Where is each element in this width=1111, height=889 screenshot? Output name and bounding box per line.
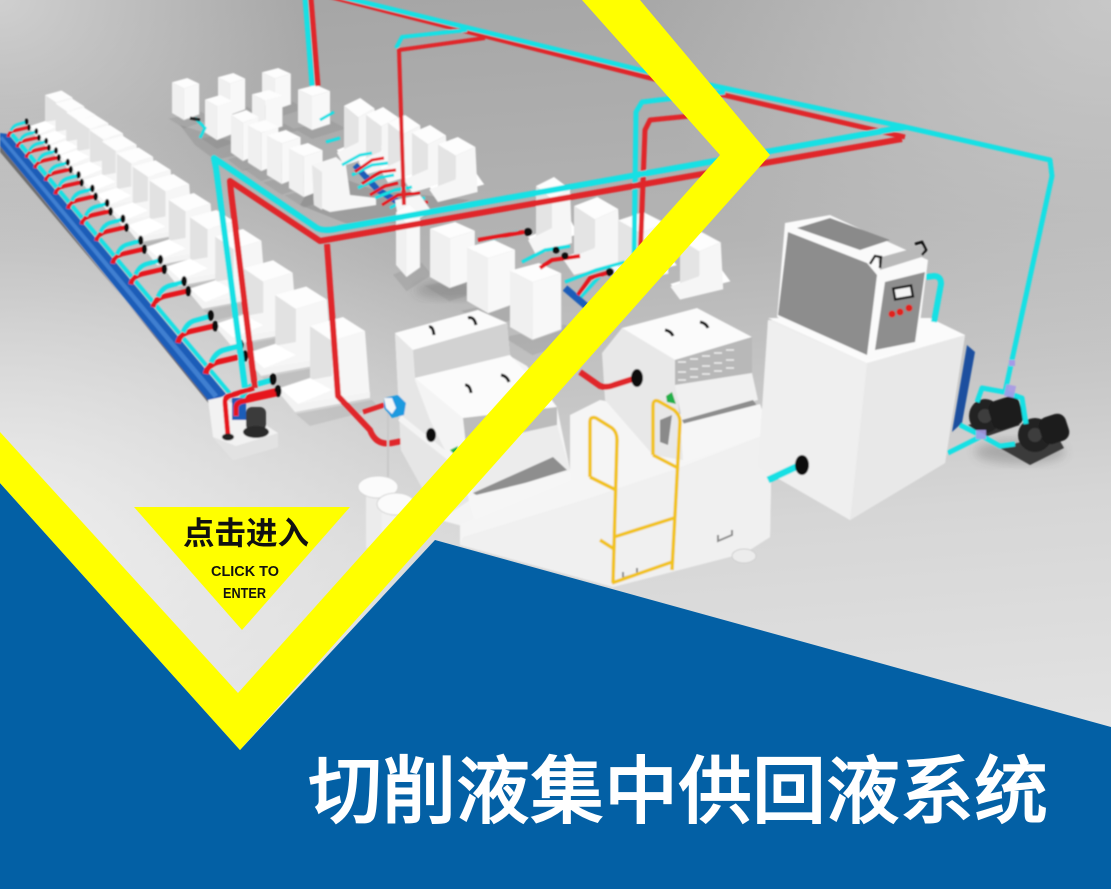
callout: click to enter triangle	[134, 507, 350, 630]
machine group: top rear	[169, 68, 484, 228]
callout heading: 点击进入	[183, 515, 309, 551]
tank: left filter unit	[395, 310, 570, 530]
machine group: centre	[393, 177, 730, 355]
control cabinet	[777, 215, 941, 360]
tank: right filter unit	[580, 308, 770, 462]
icon: blue valve	[384, 395, 458, 490]
3D system illustration	[0, 0, 1072, 587]
tank: main base	[460, 400, 772, 587]
banner: blue lower band	[0, 483, 1111, 889]
chevron: yellow arrow frame	[0, 0, 770, 750]
ladder: yellow access ladder	[590, 401, 680, 583]
pipes: upper supply and return network	[305, 0, 1052, 392]
callout English line two: ENTER	[223, 586, 266, 602]
machine row: left line	[8, 90, 380, 426]
pipes: main return lines to left line	[214, 127, 905, 443]
pumps: twin circulation pumps	[948, 360, 1072, 465]
pump station: left line	[208, 388, 278, 460]
pedestal: control cabinet base	[758, 318, 975, 520]
cylinders: filter housings	[358, 476, 415, 550]
title: 切削液集中供回液系统	[308, 750, 1048, 833]
conveyor rail: left line	[0, 132, 232, 408]
pipe: tank to pedestal inlet	[768, 455, 809, 480]
callout English line one: CLICK TO	[211, 564, 279, 580]
